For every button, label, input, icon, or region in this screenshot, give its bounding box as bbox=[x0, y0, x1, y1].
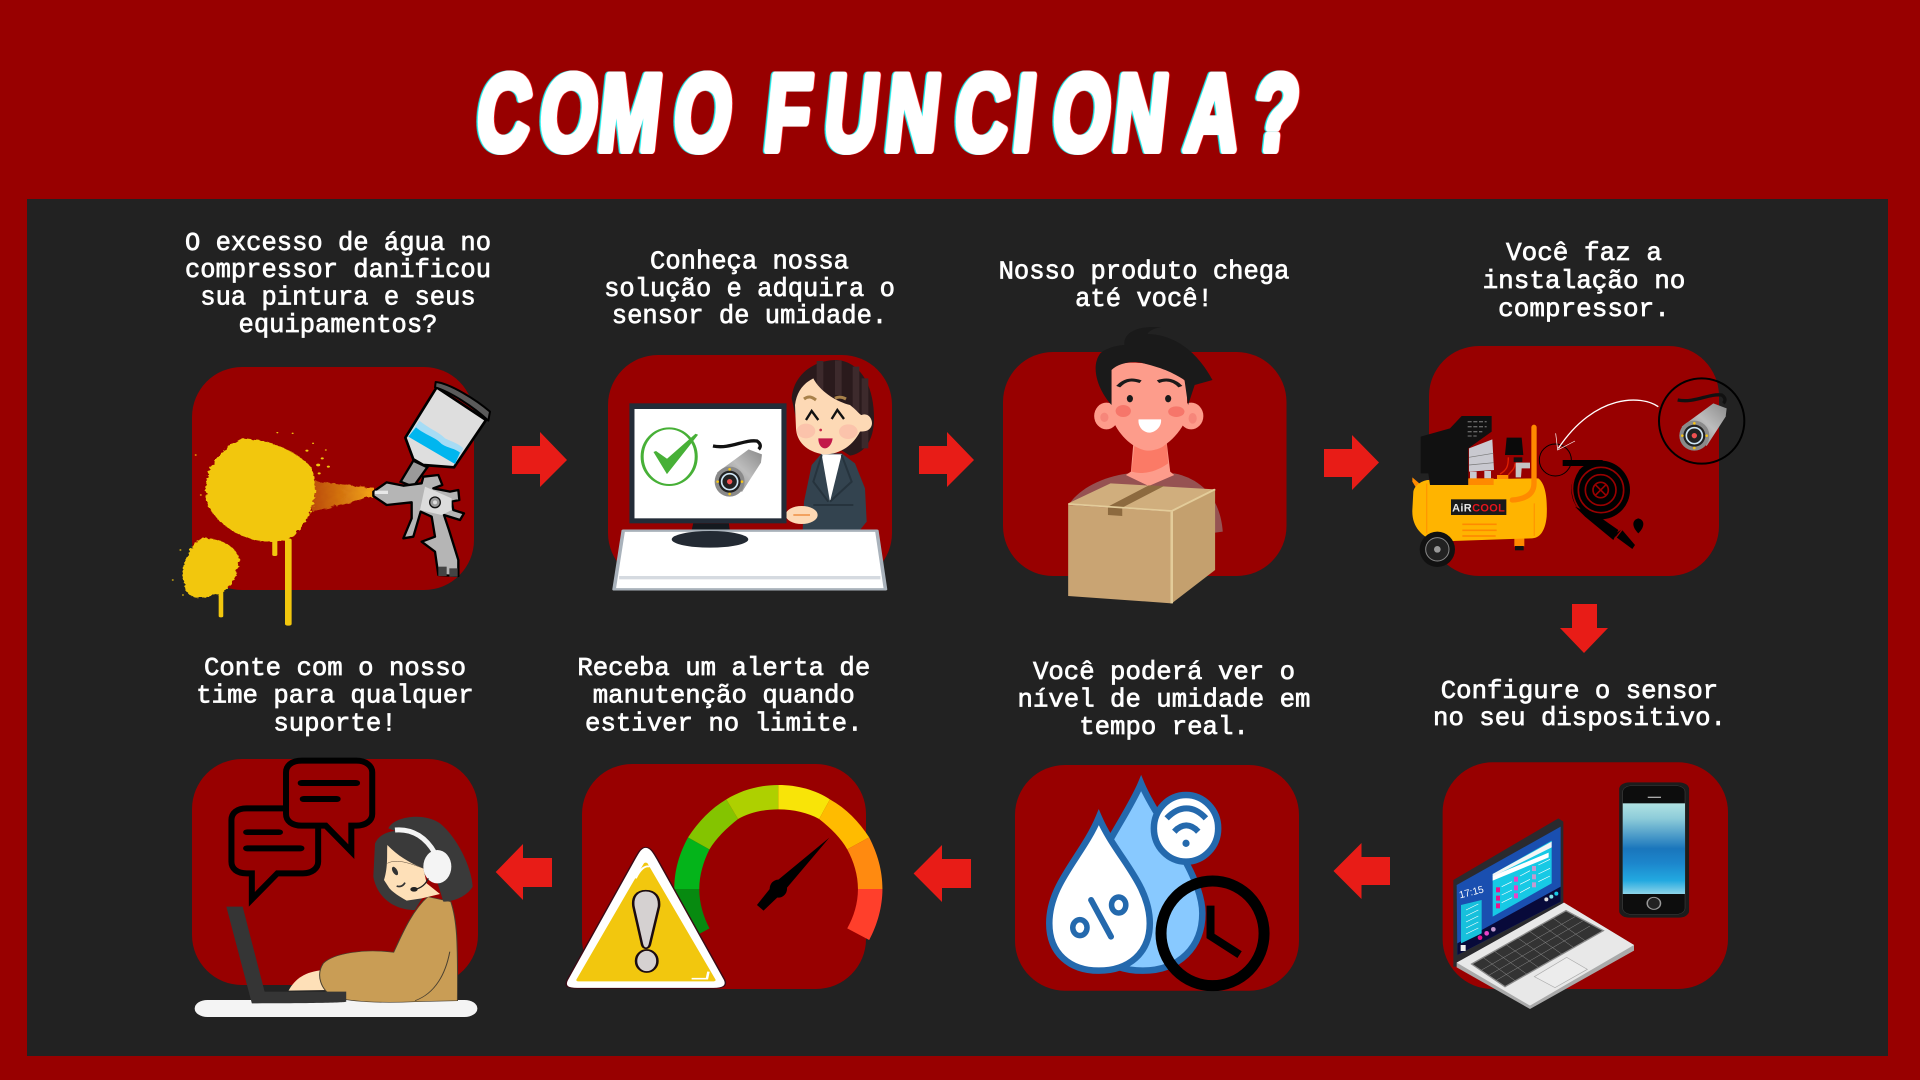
step 7 caption: Receba um alerta de bbox=[577, 654, 870, 683]
icon: water drops, wifi and clock bbox=[1049, 783, 1264, 986]
icon: chat bubbles, table, laptop and lap bbox=[195, 761, 477, 1017]
step 2 red tile bbox=[608, 355, 892, 583]
icon: laptop bbox=[1453, 818, 1634, 1009]
step 5 caption: Configure o sensor bbox=[1441, 677, 1718, 706]
step 3 caption: Nosso produto chega bbox=[999, 258, 1289, 286]
step 1 caption: equipamentos? bbox=[239, 311, 437, 340]
icon: smiling man holding a box bbox=[1068, 327, 1223, 603]
step 8 caption: time para qualquer bbox=[196, 682, 474, 710]
gauge bbox=[674, 785, 882, 940]
step 4 caption: instalação no bbox=[1483, 266, 1685, 296]
arrow: step 3 to 4 bbox=[1324, 435, 1379, 490]
step 1 caption: sua pintura e seus bbox=[200, 284, 476, 312]
step 6 caption: nível de umidade em bbox=[1018, 686, 1310, 714]
dark content panel bbox=[27, 199, 1888, 1056]
arrow: step 6 to 7 bbox=[914, 845, 971, 902]
step 8 red tile bbox=[192, 759, 478, 985]
icon: sensor on screen bbox=[713, 441, 762, 497]
panel: step 4 install on compressor bbox=[1412, 238, 1744, 576]
panel: step 5 configure sensor bbox=[1433, 677, 1728, 1009]
icon: monitor and keyboard with sensor bbox=[614, 403, 886, 589]
icon: paint splatter bbox=[172, 432, 374, 626]
icon: air compressor, hose and sensor bbox=[1412, 378, 1744, 567]
hand and body bbox=[289, 897, 458, 1002]
icon: phone bbox=[1619, 782, 1689, 918]
hose reel bbox=[1563, 460, 1643, 549]
step 5 caption: no seu dispositivo. bbox=[1433, 704, 1726, 733]
step 5 red tile bbox=[1443, 762, 1728, 989]
step 6 caption: tempo real. bbox=[1079, 713, 1249, 742]
step 1 caption: compressor danificou bbox=[185, 256, 491, 285]
chat bubbles bbox=[231, 761, 372, 899]
arrow: step 4 to 5 bbox=[1560, 604, 1608, 653]
title: COMO FUNCIONA? bbox=[472, 52, 1305, 173]
icon: support agent head with headset bbox=[373, 817, 473, 910]
step 4 caption: Você faz a bbox=[1506, 238, 1662, 268]
step 4 caption: compressor. bbox=[1498, 294, 1670, 324]
step 7 red tile bbox=[582, 764, 866, 989]
step 1 red tile bbox=[192, 367, 474, 590]
table bbox=[195, 1000, 477, 1017]
icon: speedometer gauge and warning triangle bbox=[566, 785, 882, 988]
arrow: step 1 to 2 bbox=[512, 432, 567, 487]
panel: step 3 product delivered bbox=[999, 258, 1289, 603]
step 2 caption: sensor de umidade. bbox=[612, 302, 887, 331]
step 6 red tile bbox=[1015, 765, 1299, 991]
arrow: step 7 to 8 bbox=[496, 844, 552, 900]
icon: sensor close-up bbox=[1659, 378, 1744, 464]
step 3 red tile bbox=[1003, 352, 1286, 576]
panel: step 7 maintenance alert bbox=[566, 654, 882, 989]
arrow: step 5 to 6 bbox=[1334, 843, 1390, 899]
arrow: sensor placement bbox=[1558, 400, 1658, 448]
step 7 caption: estiver no limite. bbox=[585, 710, 863, 738]
laptop clock text: 17:15 bbox=[1458, 884, 1485, 901]
compressor brand label: AiRCOOL bbox=[1452, 503, 1505, 515]
panel: step 2 know the solution bbox=[604, 248, 895, 589]
panel: step 8 support team bbox=[192, 654, 478, 1017]
panel: step 6 real-time humidity bbox=[1015, 658, 1310, 991]
step 4 red tile bbox=[1429, 346, 1719, 576]
laptop bbox=[226, 907, 346, 1003]
arrow: step 2 to 3 bbox=[919, 432, 974, 487]
step 8 caption: suporte! bbox=[273, 710, 397, 738]
icon: spray gun bbox=[370, 382, 490, 577]
step 3 caption: até você! bbox=[1075, 285, 1213, 314]
step 2 caption: solução e adquira o bbox=[604, 275, 895, 304]
icon: presenter woman bbox=[786, 360, 874, 530]
clock bbox=[1161, 881, 1264, 986]
step 8 caption: Conte com o nosso bbox=[204, 654, 466, 683]
panel: step 1 paint damage bbox=[172, 229, 491, 626]
warning triangle bbox=[566, 847, 725, 988]
step 7 caption: manutenção quando bbox=[593, 682, 855, 710]
step 6 caption: Você poderá ver o bbox=[1033, 658, 1295, 687]
step 1 caption: O excesso de água no bbox=[185, 229, 491, 258]
step 2 caption: Conheça nossa bbox=[650, 248, 849, 276]
